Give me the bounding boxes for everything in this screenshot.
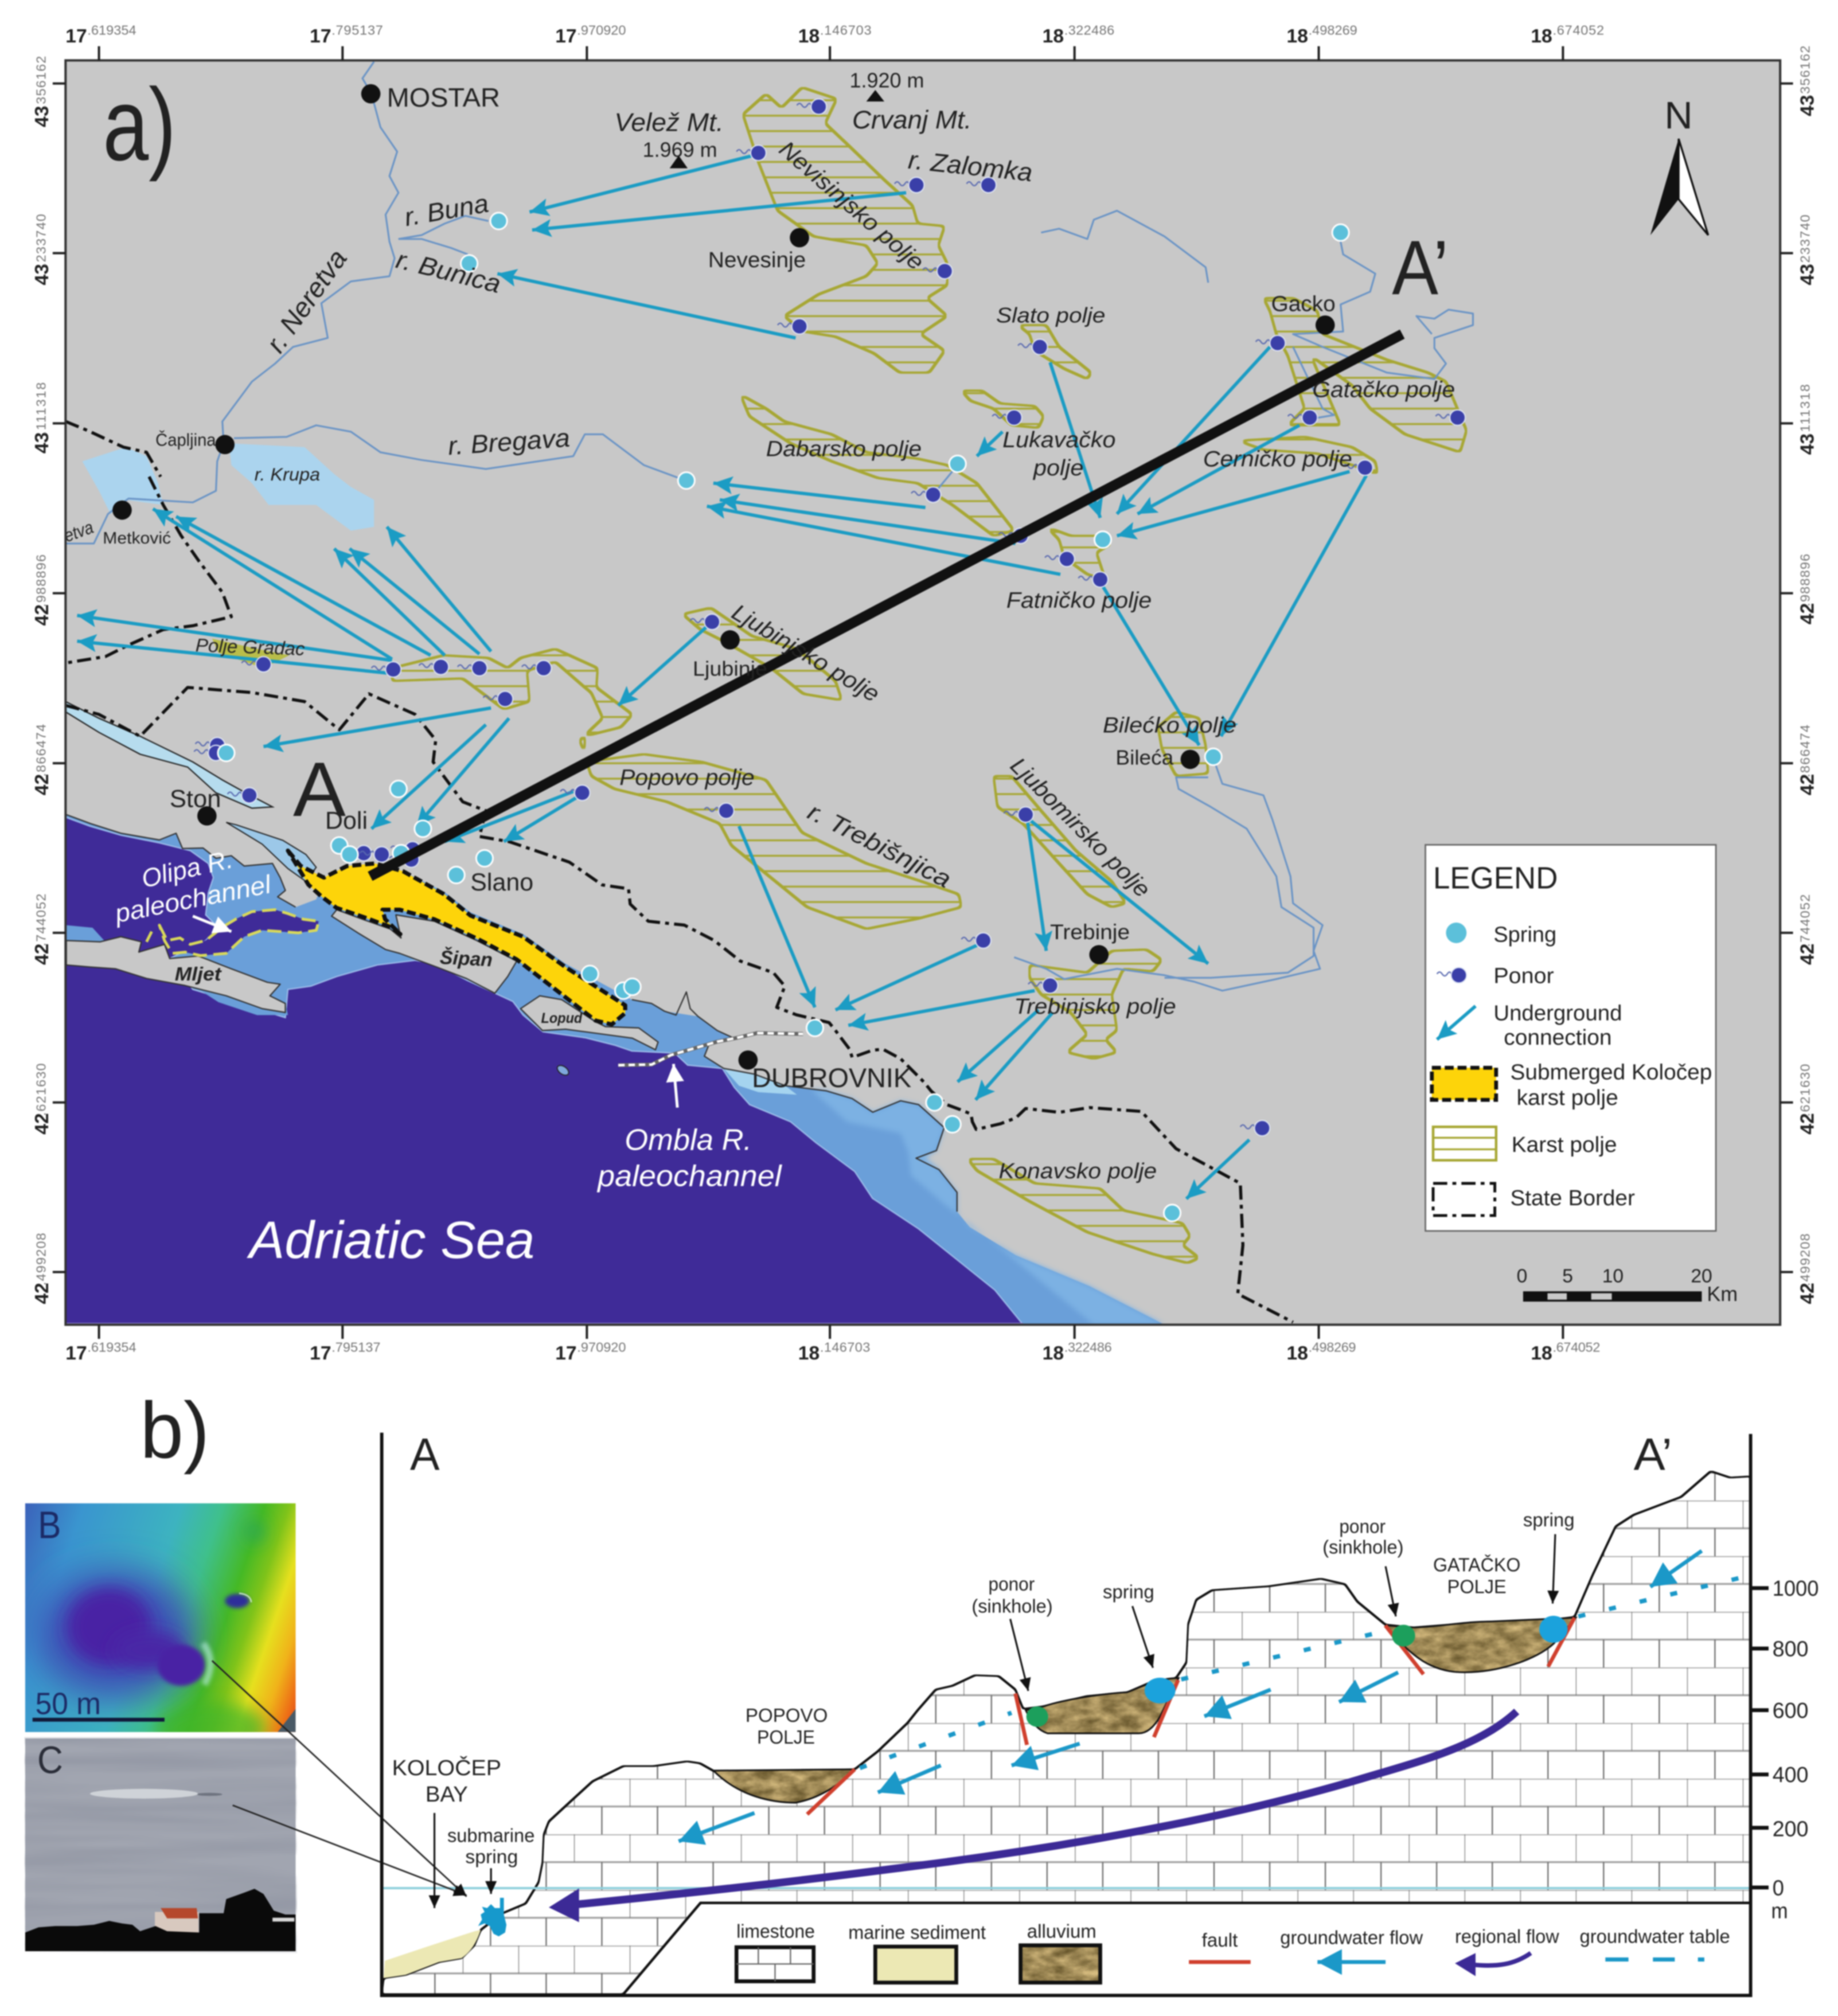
left coordinate labels: .356162	[34, 56, 49, 108]
left coordinate labels: 42	[32, 944, 53, 965]
ponor label 2	[1322, 1516, 1403, 1616]
left coordinate labels: 43	[32, 106, 53, 127]
Gatačko polje label: GATAČKO	[1433, 1554, 1520, 1576]
legend: state border: State Border	[1510, 1186, 1635, 1210]
submarine spring label and arrow: submarine	[447, 1825, 534, 1846]
map labels: Ombla R.	[625, 1123, 752, 1157]
legend: limestone: limestone	[736, 1921, 815, 1942]
map labels: r. Bunica	[393, 245, 504, 299]
alluvium: middle polje	[1026, 1678, 1178, 1733]
map labels: Šipan	[439, 946, 493, 971]
Gatačko polje label	[1433, 1554, 1520, 1598]
legend: underground connection	[1437, 1001, 1622, 1050]
legend: spring: Spring	[1493, 923, 1556, 947]
elevation scale: 1000	[1773, 1577, 1819, 1601]
right coordinate labels	[1797, 46, 1818, 1304]
right coordinate labels: 42	[1797, 603, 1818, 624]
map labels: Lopud	[541, 1011, 583, 1026]
legend: fault	[1189, 1930, 1251, 1962]
submarine spring label and arrow	[447, 1825, 534, 1894]
springs	[218, 213, 1349, 1221]
bottom coordinate labels: 17	[555, 1343, 577, 1364]
legend: karst polje	[1433, 1127, 1617, 1161]
map labels: Čapljina	[155, 431, 216, 450]
coastline east	[632, 992, 957, 1212]
map labels: Konavsko polje	[998, 1159, 1157, 1183]
map labels: etva	[61, 517, 96, 546]
lakes	[82, 443, 374, 530]
left coordinate labels: 42	[32, 1113, 53, 1135]
spring label 2: spring	[1523, 1510, 1575, 1531]
legend: ponor: Ponor	[1493, 964, 1554, 988]
legend: submerged polje	[1432, 1060, 1712, 1110]
map labels: 1.969 m	[643, 138, 717, 161]
map labels: MOSTAR	[387, 83, 500, 112]
island: Lopud	[521, 996, 658, 1050]
shallow sea	[65, 815, 1165, 1325]
legend: regional flow	[1455, 1926, 1559, 1976]
map labels: Gatačko polje	[1312, 377, 1455, 402]
legend: underground connection: Underground	[1493, 1001, 1622, 1025]
legend: marine sediment	[848, 1923, 986, 1983]
scale bar: 0	[1517, 1265, 1527, 1287]
leader lines from insets	[212, 1661, 467, 1897]
bottom coordinate labels: .619354	[87, 1339, 136, 1354]
left coordinate labels: 42	[32, 604, 53, 626]
Koločep Bay label and arrow	[392, 1755, 501, 1908]
map labels: r. Krupa	[255, 464, 320, 485]
map labels: paleochannel	[111, 870, 274, 928]
bottom coordinate labels: 18	[1043, 1343, 1064, 1364]
ponor label 1	[971, 1574, 1053, 1691]
rivers	[65, 62, 1473, 991]
Koločep Bay label and arrow: KOLOČEP	[392, 1755, 501, 1780]
right coordinate labels: 42	[1797, 1113, 1818, 1135]
map labels: 1.920 m	[849, 69, 924, 92]
top coordinate labels: .970920	[577, 23, 626, 38]
top coordinate labels	[65, 23, 1604, 47]
right coordinate labels: .988896	[1798, 554, 1813, 607]
left coordinate labels: .111318	[34, 382, 49, 435]
legend: spring	[1446, 923, 1556, 947]
left coordinate labels: .866474	[34, 724, 49, 777]
ponor label 2: ponor	[1339, 1516, 1386, 1537]
submerged Koločep karst polje	[288, 850, 625, 1025]
map labels	[61, 67, 1455, 1269]
bottom coordinate labels: 18	[1531, 1343, 1552, 1364]
section end labels: A’	[1634, 1429, 1672, 1480]
left coordinate labels: 43	[32, 432, 53, 454]
groundwater flow arrows	[678, 1551, 1702, 1841]
north arrow	[1650, 94, 1708, 235]
inset C: photo of submarine spring	[25, 1738, 295, 1951]
left coordinate labels	[32, 56, 53, 1304]
right coordinate labels: 42	[1797, 1283, 1818, 1304]
terrain outline	[382, 1471, 1751, 1994]
top coordinate labels: 17	[555, 26, 577, 47]
map labels: Cerničko polje	[1203, 447, 1352, 471]
elevation scale: 800	[1773, 1638, 1808, 1662]
inset C label: C	[37, 1738, 63, 1781]
ponor label 1: (sinkhole)	[971, 1596, 1053, 1617]
map labels: Velež Mt.	[614, 108, 724, 137]
map labels: Ljubomirsko polje	[1005, 752, 1156, 902]
left coordinate labels: .744052	[34, 894, 49, 946]
bottom coordinate labels: .674052	[1552, 1339, 1600, 1354]
state borders	[65, 421, 1293, 1322]
Mljet shallow fringe	[193, 986, 288, 1015]
Koločep Bay label and arrow: BAY	[426, 1783, 468, 1807]
Olipa paleochannel	[147, 910, 319, 956]
top coordinate labels: .619354	[87, 23, 136, 38]
top coordinate labels: 18	[1531, 26, 1552, 47]
mountain peaks	[670, 90, 884, 169]
faults	[807, 1618, 1575, 1814]
legend: marine sediment: marine sediment	[848, 1923, 986, 1944]
ponor label 1: ponor	[989, 1574, 1035, 1595]
spring label 1	[1103, 1582, 1154, 1668]
right coordinate labels: .111318	[1798, 384, 1813, 437]
elevation scale: 0	[1773, 1876, 1784, 1900]
legend: fault: fault	[1202, 1930, 1238, 1951]
map labels: A’	[1392, 225, 1449, 311]
map labels: Ljubinje	[693, 658, 767, 681]
map legend	[1426, 845, 1716, 1231]
top coordinate labels: 18	[798, 26, 820, 47]
panel a: map	[0, 0, 1838, 1413]
spring markers	[1145, 1616, 1567, 1704]
section end labels	[410, 1429, 1672, 1480]
map labels: r. Trebišnjica	[803, 798, 955, 893]
map labels: Ston	[170, 785, 221, 812]
map labels: Nevesinje	[708, 248, 806, 272]
section end labels: A	[410, 1429, 440, 1480]
elevation scale: 200	[1773, 1817, 1808, 1841]
profile axes	[382, 1433, 1751, 1995]
inset B label: B	[38, 1503, 61, 1546]
left coordinate labels: 43	[32, 264, 53, 285]
bottom coordinate labels: 18	[1287, 1343, 1308, 1364]
regional flow arrow	[549, 1712, 1517, 1922]
left coordinate labels: .988896	[34, 554, 49, 607]
bottom coordinate labels: 17	[65, 1343, 87, 1364]
silhouette with house	[25, 1889, 295, 1951]
bottom coordinate labels: .795137	[331, 1339, 380, 1354]
legend box edge	[623, 1903, 1751, 1994]
top coordinate labels: 17	[310, 26, 331, 47]
legend: karst polje: Karst polje	[1512, 1133, 1617, 1157]
left coordinate labels: 42	[32, 1283, 53, 1304]
map labels: Olipa R.	[139, 845, 236, 893]
submarine spring label and arrow: spring	[465, 1846, 518, 1867]
islet	[556, 1064, 571, 1077]
scale bar: 10	[1602, 1265, 1624, 1287]
top coordinate labels: .498269	[1309, 23, 1357, 38]
scale bar: 5	[1562, 1265, 1573, 1287]
Ombla paleochannel	[618, 1033, 803, 1065]
legend: submerged polje: karst polje	[1517, 1086, 1618, 1110]
sea level line	[382, 1888, 1751, 1889]
coastline	[67, 815, 295, 907]
ponor label 2: (sinkhole)	[1322, 1537, 1403, 1558]
ponors	[194, 99, 1465, 1136]
deep sea	[65, 817, 1023, 1325]
map labels: Popovo polje	[619, 765, 755, 790]
left coordinate labels: 42	[32, 774, 53, 795]
elevation scale	[1751, 1577, 1819, 1924]
scale bar: 20	[1691, 1265, 1712, 1287]
submarine spring blob	[478, 1898, 506, 1936]
legend: groundwater table: groundwater table	[1580, 1926, 1730, 1947]
map labels: Fatničko polje	[1006, 588, 1152, 613]
Popovo polje label: POLJE	[757, 1727, 815, 1748]
panel b: cross-section	[212, 1429, 1819, 2005]
Ston channel	[226, 822, 316, 881]
alluvium: Popovo polje	[713, 1769, 854, 1803]
map labels: r. Neretva	[260, 244, 353, 358]
ponor markers	[1027, 1625, 1415, 1727]
legend: alluvium	[1021, 1921, 1101, 1983]
paleochannel callout arrows	[193, 916, 677, 1108]
bottom coordinate labels: .146703	[820, 1339, 870, 1354]
sea bottom line	[65, 1323, 1023, 1324]
panel letter a: a)	[103, 67, 176, 182]
top coordinate labels: .795137	[331, 23, 383, 38]
groundwater table	[860, 1577, 1746, 1768]
top coordinate labels: .146703	[820, 23, 872, 38]
map labels: r. Zalomka	[907, 146, 1034, 187]
map labels: Slato polje	[996, 303, 1105, 327]
map background	[65, 60, 1780, 1325]
map frame and ticks	[53, 46, 1793, 1339]
lighter inner shelf	[811, 1089, 1165, 1325]
channel north of Pelješac	[65, 702, 272, 808]
legend: alluvium: alluvium	[1027, 1921, 1096, 1942]
section legend	[736, 1921, 1730, 1983]
map labels: Lukavačko	[1002, 428, 1115, 452]
top coordinate labels: .674052	[1552, 23, 1604, 38]
bottom coordinate labels: 18	[798, 1343, 820, 1364]
map labels: Dabarsko polje	[766, 437, 922, 462]
marine sediment	[384, 1930, 481, 1978]
polje Gradac	[212, 639, 289, 668]
map labels: Doli	[325, 807, 368, 834]
bottom coordinate labels	[65, 1339, 1600, 1364]
left coordinate labels: .621630	[34, 1063, 49, 1116]
top coordinate labels: 17	[65, 26, 87, 47]
island: Šipan	[331, 910, 517, 993]
panel b heading: b)	[140, 1386, 209, 1475]
map legend: LEGEND	[1433, 861, 1558, 896]
top coordinate labels: 18	[1043, 26, 1064, 47]
right coordinate labels: 43	[1797, 264, 1818, 285]
profile line A-A'	[370, 334, 1402, 876]
bottom coordinate labels: 17	[310, 1343, 331, 1364]
legend: limestone	[736, 1921, 815, 1981]
map labels: Mljet	[175, 964, 222, 985]
right coordinate labels: .744052	[1798, 894, 1813, 947]
bottom coordinate labels: .322486	[1064, 1339, 1112, 1354]
legend: state border	[1433, 1183, 1635, 1216]
bottom coordinate labels: .498269	[1309, 1339, 1356, 1354]
map labels: Polje Gradac	[195, 635, 305, 659]
legend: underground connection: connection	[1504, 1026, 1612, 1050]
polje hatching	[0, 0, 1838, 1413]
pale water near Dubrovnik	[724, 1068, 797, 1095]
elevation scale: 600	[1773, 1699, 1808, 1723]
underground connection arrows	[77, 154, 1366, 1199]
Popovo polje label	[746, 1705, 828, 1748]
right coordinate labels: 43	[1797, 433, 1818, 455]
spring label 2	[1523, 1510, 1575, 1604]
inset B: bathymetry	[25, 1503, 295, 1754]
map labels: Metković	[103, 529, 171, 548]
map labels: Trebinje	[1050, 920, 1130, 944]
map labels: Bilećko polje	[1103, 713, 1236, 737]
right coordinate labels: 43	[1797, 95, 1818, 116]
map labels: Nevisinjsko polje	[774, 136, 929, 275]
inset B scale: 50 m	[36, 1686, 101, 1721]
shallow patch by Mljet	[65, 925, 106, 942]
map labels: Slano	[470, 869, 533, 896]
right coordinate labels: 42	[1797, 944, 1818, 965]
limestone terrain	[373, 1465, 1761, 2005]
north arrow: N	[1664, 94, 1693, 137]
left coordinate labels: .499208	[34, 1233, 49, 1286]
right coordinate labels: .621630	[1798, 1064, 1813, 1116]
elevation scale: m	[1771, 1900, 1788, 1924]
right coordinate labels: .356162	[1798, 46, 1813, 98]
right coordinate labels: .499208	[1798, 1233, 1813, 1286]
Popovo polje label: POPOVO	[746, 1705, 828, 1726]
legend: submerged polje: Submerged Koločep	[1510, 1060, 1712, 1084]
right coordinate labels: .233740	[1798, 214, 1813, 267]
spring label 1: spring	[1103, 1582, 1154, 1603]
top coordinate labels: .322486	[1064, 23, 1114, 38]
map labels: r. Buna	[402, 189, 491, 232]
Gatačko polje label: POLJE	[1447, 1577, 1507, 1598]
top coordinate labels: 18	[1287, 26, 1308, 47]
map labels: DUBROVNIK	[752, 1062, 911, 1093]
map labels: A	[293, 747, 346, 833]
right coordinate labels: .866474	[1798, 725, 1813, 778]
map labels: Ljubinjsko polje	[727, 599, 884, 707]
legend: regional flow: regional flow	[1455, 1926, 1559, 1947]
map labels: Gacko	[1271, 292, 1336, 316]
sea and coast	[65, 702, 1165, 1325]
map labels: paleochannel	[596, 1159, 782, 1192]
elevation scale: 400	[1773, 1763, 1808, 1787]
bottom coordinate labels: .970920	[577, 1339, 626, 1354]
legend: groundwater flow: groundwater flow	[1280, 1928, 1423, 1949]
map labels: polje	[1033, 456, 1083, 480]
cities	[112, 84, 1335, 1070]
legend: ponor	[1437, 964, 1554, 988]
map labels: r. Bregava	[447, 424, 571, 460]
scale bar	[1517, 1265, 1738, 1306]
left coordinate labels: .233740	[34, 214, 49, 267]
right coordinate labels: 42	[1797, 774, 1818, 795]
map labels: Crvanj Mt.	[852, 106, 971, 134]
map labels: Bileća	[1115, 746, 1173, 769]
scale bar: Km	[1707, 1283, 1738, 1306]
karst poljes	[0, 0, 1838, 1413]
map labels: Trebinjsko polje	[1014, 995, 1176, 1019]
map labels: Adriatic Sea	[247, 1211, 534, 1269]
polje outlines	[392, 87, 1466, 1263]
island: Mljet	[67, 937, 286, 1013]
alluvium: Gatačko polje	[1386, 1618, 1576, 1673]
